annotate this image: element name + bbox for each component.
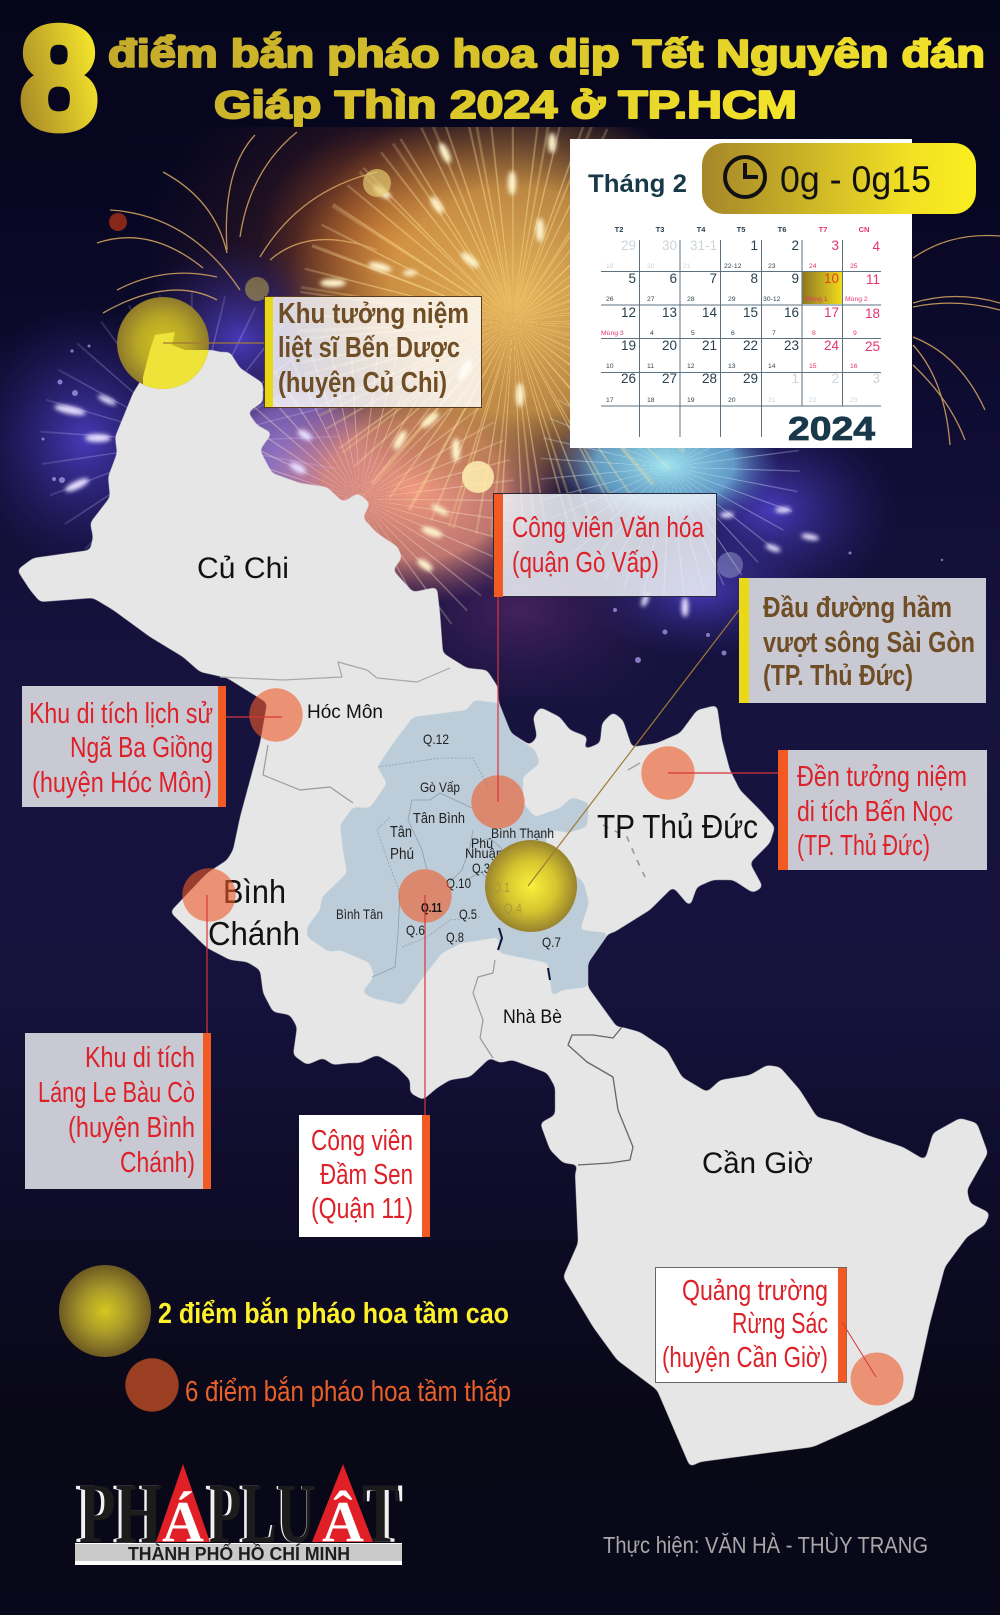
callout: Công viên Đầm Sen: (Quận 11): [311, 1193, 413, 1225]
lunar dates: Mùng 3: [601, 330, 624, 337]
district labels: Q.8: [446, 929, 464, 945]
callout: Khu di tích lịch sử Ngã Ba Giồng: (huyện Hóc Môn): [32, 767, 212, 799]
lunar dates: Mùng 1: [805, 296, 828, 303]
solar dates: 13: [662, 305, 677, 320]
solar dates: [621, 238, 880, 386]
calendar grid: [601, 240, 881, 437]
solar dates: 30: [662, 238, 677, 253]
solar dates: 14: [702, 305, 717, 320]
callout: Công viên Đầm Sen: [299, 1115, 430, 1237]
callout: Khu di tích lịch sử Ngã Ba Giồng: Khu di tích lịch sử: [29, 698, 213, 730]
district labels: Bình: [223, 873, 286, 910]
weekday headers: T5: [737, 225, 745, 234]
callout: Công viên Văn hóa: Công viên Văn hóa: [512, 512, 705, 544]
map of Ho Chi Minh City: [17, 332, 990, 1467]
solar dates: 7: [709, 271, 717, 286]
marker: Bến Dược high fireworks: [117, 297, 209, 389]
solar dates: 2: [791, 238, 799, 253]
solar dates: 23: [784, 338, 799, 353]
callout: Công viên Đầm Sen: Công viên: [311, 1125, 413, 1157]
solar dates: 26: [621, 371, 636, 386]
land outline: [17, 332, 990, 1467]
callout: Công viên Văn hóa: [494, 494, 716, 597]
leader lines: [163, 343, 778, 1115]
callout: Khu tưởng niệm liệt sĩ Bến Dược: (huyện Củ Chi): [278, 367, 447, 399]
label: Q.1 and Q.4 under marker: Q.4: [504, 900, 522, 916]
district labels: Củ Chi: [197, 552, 289, 585]
solar dates: 6: [669, 271, 677, 286]
district labels: Phú: [471, 835, 493, 851]
calendar card: [570, 139, 912, 448]
callout: Quảng trường Rừng Sác: Rừng Sác: [732, 1308, 828, 1340]
lunar dates: 28: [687, 296, 695, 303]
solar dates: 21: [702, 338, 717, 353]
district labels: Bình Tân: [336, 906, 383, 922]
callout: Quảng trường Rừng Sác: Quảng trường: [682, 1275, 828, 1307]
lunar dates: 26: [606, 296, 614, 303]
solar dates: 11: [866, 272, 880, 287]
solar dates: 16: [784, 305, 799, 320]
time pill: 0g - 0g15: [780, 159, 931, 200]
logo wordmark: PLU: [205, 1465, 315, 1561]
solar dates: 3: [831, 238, 839, 253]
burst: purple: [40, 292, 340, 550]
year: 2024: [788, 410, 876, 447]
title line 1: điểm bắn pháo hoa dịp Tết Nguyên đán: [108, 32, 985, 76]
logo wordmark: PH: [75, 1465, 160, 1561]
callout: Công viên Văn hóa: (quận Gò Vấp): [512, 547, 659, 579]
callout: Khu tưởng niệm liệt sĩ Bến Dược: Khu tưởng niệm: [278, 298, 469, 330]
solar dates: 5: [628, 271, 636, 286]
burst: cyan: [540, 399, 800, 586]
highlighted day cell: [802, 272, 843, 304]
lunar dates: 19: [606, 263, 614, 270]
calendar paper: [570, 139, 912, 448]
district labels: TP Thủ Đức: [597, 808, 758, 845]
logo red letter Â: [312, 1464, 373, 1554]
lunar dates: 19: [687, 397, 695, 404]
weekday headers: CN: [859, 225, 869, 234]
logo wordmark: [75, 1465, 403, 1561]
solar dates: 29: [743, 371, 758, 386]
burst: gold: [300, 127, 686, 536]
logo wordmark: PLU: [209, 1465, 315, 1561]
logo: Pháp Luật TP.HCM: [75, 1464, 403, 1565]
district labels: Q.7: [542, 934, 561, 950]
callout: Đền tưởng niệm di tích Bến Nọc: [778, 750, 987, 870]
legend: low fireworks: 6 điểm bắn pháo hoa tầm thấp: [185, 1375, 511, 1408]
lunar dates: 22: [809, 397, 817, 404]
callout: Công viên Đầm Sen: Đầm Sen: [320, 1159, 413, 1191]
solar dates: 27: [662, 371, 677, 386]
solar dates: 25: [865, 339, 880, 354]
label: Q.1 and Q.4 under marker: Q.1: [493, 879, 510, 895]
lunar dates: 5: [691, 330, 695, 337]
lunar dates: 20: [647, 263, 655, 270]
lunar dates: 12: [687, 363, 695, 370]
solar dates: 10: [824, 271, 839, 286]
district labels: Q.10: [446, 875, 471, 891]
solar dates: 24: [824, 338, 839, 353]
district labels: Q.3: [472, 860, 490, 876]
callout: Khu di tích lịch sử Ngã Ba Giồng: [22, 686, 226, 807]
lunar dates: 24: [809, 263, 817, 270]
lunar dates: 13: [728, 363, 736, 370]
logo red letter A: [156, 1464, 210, 1554]
legend: [59, 1265, 511, 1412]
month heading: Tháng 2: [588, 170, 687, 198]
logo wordmark: T: [366, 1465, 403, 1561]
callout: Đền tưởng niệm di tích Bến Nọc: di tích Bến Nọc: [797, 796, 953, 828]
solar dates: 31-1: [690, 238, 717, 253]
logo strap: THÀNH PHỐ HỒ CHÍ MINH: [128, 1543, 350, 1564]
lunar dates: 25: [850, 263, 858, 270]
solar dates: 9: [791, 271, 799, 286]
logo red letter Â: Â: [322, 1489, 364, 1554]
lunar dates: 9: [853, 330, 857, 337]
solar dates: 1: [750, 238, 758, 253]
title line 2: Giáp Thìn 2024 ở TP.HCM: [214, 84, 797, 127]
callout: Khu di tích Láng Le Bàu Cò: Khu di tích: [85, 1042, 195, 1074]
solar dates: 1: [791, 371, 799, 386]
lunar dates: 11: [647, 363, 654, 370]
weekday headers: T4: [697, 225, 706, 234]
weekday headers: [615, 225, 869, 234]
lunar dates: 6: [731, 330, 735, 337]
callout: Khu di tích Láng Le Bàu Cò: (huyện Bình: [68, 1112, 195, 1144]
solar dates: 20: [662, 338, 677, 353]
callout: Đầu đường hầm vượt sông Sài Gòn: Đầu đường hầm: [763, 592, 952, 624]
lunar dates: 15: [809, 363, 817, 370]
callout: Khu tưởng niệm liệt sĩ Bến Dược: [264, 296, 482, 408]
lunar dates: 22-12: [724, 263, 742, 270]
label: Q.11: Q.11: [421, 900, 442, 915]
burst: salmon: [254, 353, 514, 624]
weekday headers: T7: [819, 225, 827, 234]
district labels: Bình Thạnh: [491, 825, 554, 841]
logo wordmark: T: [362, 1465, 399, 1561]
callout: Quảng trường Rừng Sác: (huyện Cần Giờ): [662, 1342, 828, 1374]
solar dates: 19: [621, 338, 636, 353]
callout: Khu di tích Láng Le Bàu Cò: Chánh): [120, 1147, 195, 1179]
lunar dates: 7: [772, 330, 776, 337]
legend: high fireworks: 2 điểm bắn pháo hoa tầm cao: [158, 1296, 509, 1330]
legend: high fireworks: [59, 1265, 509, 1357]
credit: Thực hiện: VĂN HÀ - THÙY TRANG: [603, 1532, 928, 1558]
inner urban districts: [307, 700, 609, 1005]
district labels: Q.5: [459, 906, 477, 922]
solar dates: 4: [872, 239, 880, 254]
lunar dates: 8: [812, 330, 816, 337]
callout: Đền tưởng niệm di tích Bến Nọc: (TP. Thủ Đức): [797, 830, 930, 862]
legend: low fireworks: [125, 1358, 511, 1412]
sparks and arcs: [42, 130, 1000, 663]
district labels: Gò Vấp: [420, 779, 460, 795]
leader over box: Rừng Sác: [842, 1322, 876, 1377]
logo wordmark: PH: [79, 1465, 162, 1561]
district and river boundaries: [372, 758, 503, 977]
district labels: Cần Giờ: [702, 1147, 813, 1180]
district labels: Q.6: [406, 922, 425, 938]
lunar dates: 23: [850, 397, 858, 404]
lunar dates: 17: [606, 397, 614, 404]
district labels: Tân: [390, 824, 412, 841]
markers: low fireworks: [182, 688, 904, 1406]
weekday headers: T2: [615, 225, 623, 234]
lunar dates: 30-12: [763, 296, 781, 303]
solar dates: 3: [872, 371, 880, 386]
solar dates: 29: [621, 238, 636, 253]
solar dates: 15: [743, 305, 758, 320]
weekday headers: T3: [656, 225, 664, 234]
solar dates: 28: [702, 371, 717, 386]
callout: Đầu đường hầm vượt sông Sài Gòn: (TP. Thủ Đức): [763, 660, 913, 692]
district labels: Tân Bình: [413, 810, 465, 827]
time pill: [702, 143, 976, 214]
solar dates: 8: [750, 271, 758, 286]
solar dates: 2: [831, 371, 839, 386]
solar dates: 22: [743, 338, 758, 353]
lunar dates: 29: [728, 296, 736, 303]
callout: Khu di tích Láng Le Bàu Cò: Láng Le Bàu Cò: [38, 1077, 195, 1109]
lunar dates: 21: [768, 397, 776, 404]
district labels: [197, 552, 813, 1180]
lunar dates: 23: [768, 263, 776, 270]
district labels: Chánh: [208, 915, 300, 952]
callout: Khu tưởng niệm liệt sĩ Bến Dược: liệt sĩ Bến Dược: [278, 332, 460, 364]
district labels: Nhuận: [465, 845, 503, 861]
district labels: Nhà Bè: [503, 1007, 562, 1028]
solar dates: 17: [824, 305, 839, 320]
soft colour glows: [0, 127, 883, 686]
lunar dates: 21: [683, 263, 691, 270]
lunar dates: 18: [647, 397, 655, 404]
solar dates: 12: [621, 305, 636, 320]
marker: Sài Gòn tunnel high fireworks: [485, 840, 577, 932]
logo red letter A: Á: [162, 1489, 204, 1554]
lunar dates: 27: [647, 296, 655, 303]
fireworks backdrop: [0, 127, 1000, 686]
big numeral 8: 8: [20, 0, 98, 159]
lunar dates: 14: [768, 363, 776, 370]
callout: Khu di tích lịch sử Ngã Ba Giồng: Ngã Ba Giồng: [70, 732, 213, 764]
weekday headers: T6: [778, 225, 786, 234]
title: [20, 0, 985, 159]
lunar dates: 16: [850, 363, 858, 370]
icon: clock: [725, 157, 765, 197]
label: Q.1 and Q.4 under marker: [493, 879, 522, 916]
district labels: Hóc Môn: [307, 702, 383, 723]
lunar dates: Mùng 2: [845, 296, 868, 303]
logo strap: [75, 1543, 402, 1565]
solar dates: 18: [865, 306, 880, 321]
lunar dates: 10: [606, 363, 614, 370]
district labels: Phú: [390, 846, 414, 863]
callout: Khu di tích Láng Le Bàu Cò: [25, 1033, 211, 1189]
lunar dates: 20: [728, 397, 736, 404]
lunar dates: [601, 263, 868, 404]
callout: Quảng trường Rừng Sác: [656, 1268, 846, 1382]
callout: Đầu đường hầm vượt sông Sài Gòn: [739, 578, 986, 703]
lunar dates: 4: [650, 330, 654, 337]
district labels: Q.12: [423, 731, 449, 747]
